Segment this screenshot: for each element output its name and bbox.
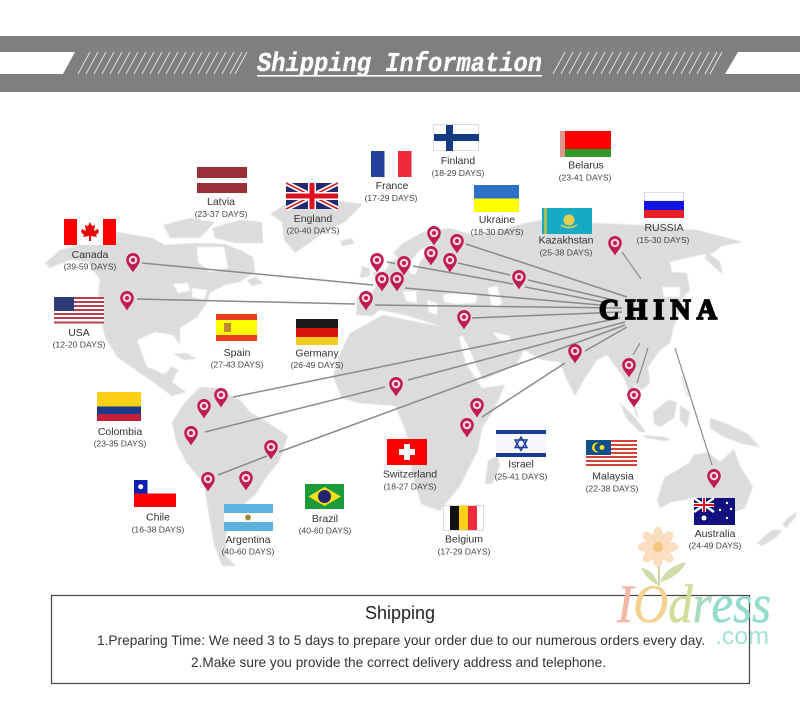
watermark logo <box>616 527 771 650</box>
flag: USA: (12-20 DAYS) <box>53 340 106 350</box>
watermark logo: IOdress <box>616 575 771 635</box>
flag: Russia <box>637 192 690 245</box>
flag: Spain <box>211 314 264 370</box>
world map <box>45 199 797 566</box>
flag: Russia: (15-30 DAYS) <box>637 235 690 245</box>
flag: Chile: Chile <box>146 512 170 524</box>
watermark logo: .com <box>715 623 769 650</box>
flag: Brazil <box>299 484 352 536</box>
flag: England: England <box>294 213 332 225</box>
flag: Australia: (24-49 DAYS) <box>689 540 742 550</box>
flag: Argentina: (40-60 DAYS) <box>222 546 275 556</box>
flag: Switzerland: Switzerland <box>383 468 437 480</box>
flag: Israel <box>495 430 548 482</box>
flag: Ukraine: (18-30 DAYS) <box>471 227 524 237</box>
flag: Israel: (25-41 DAYS) <box>495 472 548 482</box>
flag: Latvia: (23-37 DAYS) <box>195 209 248 219</box>
flag: USA <box>53 297 106 350</box>
flag: Finland: (18-29 DAYS) <box>432 168 485 178</box>
flag: Germany: Germany <box>295 348 339 360</box>
flag: Switzerland <box>383 439 437 492</box>
flag: Belgium: (17-29 DAYS) <box>438 546 491 556</box>
label: CHINA: CHINA <box>599 295 718 326</box>
flag: Colombia: (23-35 DAYS) <box>94 438 147 448</box>
flag: Kazakhstan: Kazakhstan <box>539 234 594 246</box>
flag: France: France <box>376 180 408 192</box>
flag: Australia: Australia <box>695 528 736 540</box>
flag: Canada: Canada <box>72 249 109 261</box>
header banner <box>0 36 800 92</box>
flag: Malaysia: (22-38 DAYS) <box>586 484 639 494</box>
flag: Colombia: Colombia <box>98 426 142 438</box>
flag: Canada: (39-59 DAYS) <box>64 262 117 272</box>
flag: Spain: Spain <box>224 347 251 359</box>
flag: England <box>286 183 340 236</box>
flag: Brazil: (40-60 DAYS) <box>299 526 352 536</box>
flag: Belgium <box>438 506 491 556</box>
flag: Switzerland: (18-27 DAYS) <box>384 482 437 492</box>
flag: Belarus <box>559 131 612 182</box>
flag: France <box>365 151 418 203</box>
flag: Ukraine: Ukraine <box>479 214 515 226</box>
flag: Chile: (16-38 DAYS) <box>132 524 185 534</box>
flag: Brazil: Brazil <box>312 513 338 525</box>
flag: Finland: Finland <box>441 155 475 167</box>
flag: Ukraine <box>471 185 524 237</box>
flag: Belarus: (23-41 DAYS) <box>559 172 612 182</box>
flag: Russia: RUSSIA <box>644 222 684 234</box>
flag: Argentina: Argentina <box>226 534 271 546</box>
flag: USA: USA <box>68 327 90 339</box>
flag: Kazakhstan: (25-38 DAYS) <box>540 248 593 258</box>
flag: Argentina <box>222 504 275 556</box>
icon: flower <box>638 527 686 586</box>
title: Shipping Information <box>257 50 542 80</box>
flag: Belgium: Belgium <box>445 534 483 546</box>
flag: Kazakhstan <box>539 208 594 258</box>
flag: Latvia <box>195 167 248 219</box>
flag: Germany: (26-49 DAYS) <box>291 360 344 370</box>
shipping notes box: Shipping <box>365 603 435 623</box>
flag: France: (17-29 DAYS) <box>365 193 418 203</box>
flag: Belarus: Belarus <box>568 160 604 172</box>
flag: England: (20-40 DAYS) <box>287 226 340 236</box>
flag: Latvia: Latvia <box>207 196 235 208</box>
shipping notes box: 1.Preparing Time: We need 3 to 5 days to prepare your order due to our numerous orders every day. <box>97 632 705 648</box>
flag: Chile <box>132 480 185 534</box>
flag: Colombia <box>94 392 147 448</box>
shipping notes box: 2.Make sure you provide the correct delivery address and telephone. <box>191 654 606 670</box>
flag: Malaysia <box>586 440 639 494</box>
shipping notes box <box>52 596 750 684</box>
flag: Australia <box>689 498 742 550</box>
route lines <box>137 244 712 475</box>
flag: Canada <box>64 219 117 272</box>
flag: Finland <box>432 124 485 178</box>
flag: Spain: (27-43 DAYS) <box>211 360 264 370</box>
map pins <box>120 226 721 492</box>
flag: Germany <box>291 319 344 370</box>
flag: Israel: Israel <box>508 458 534 470</box>
flag: Malaysia: Malaysia <box>592 470 634 482</box>
